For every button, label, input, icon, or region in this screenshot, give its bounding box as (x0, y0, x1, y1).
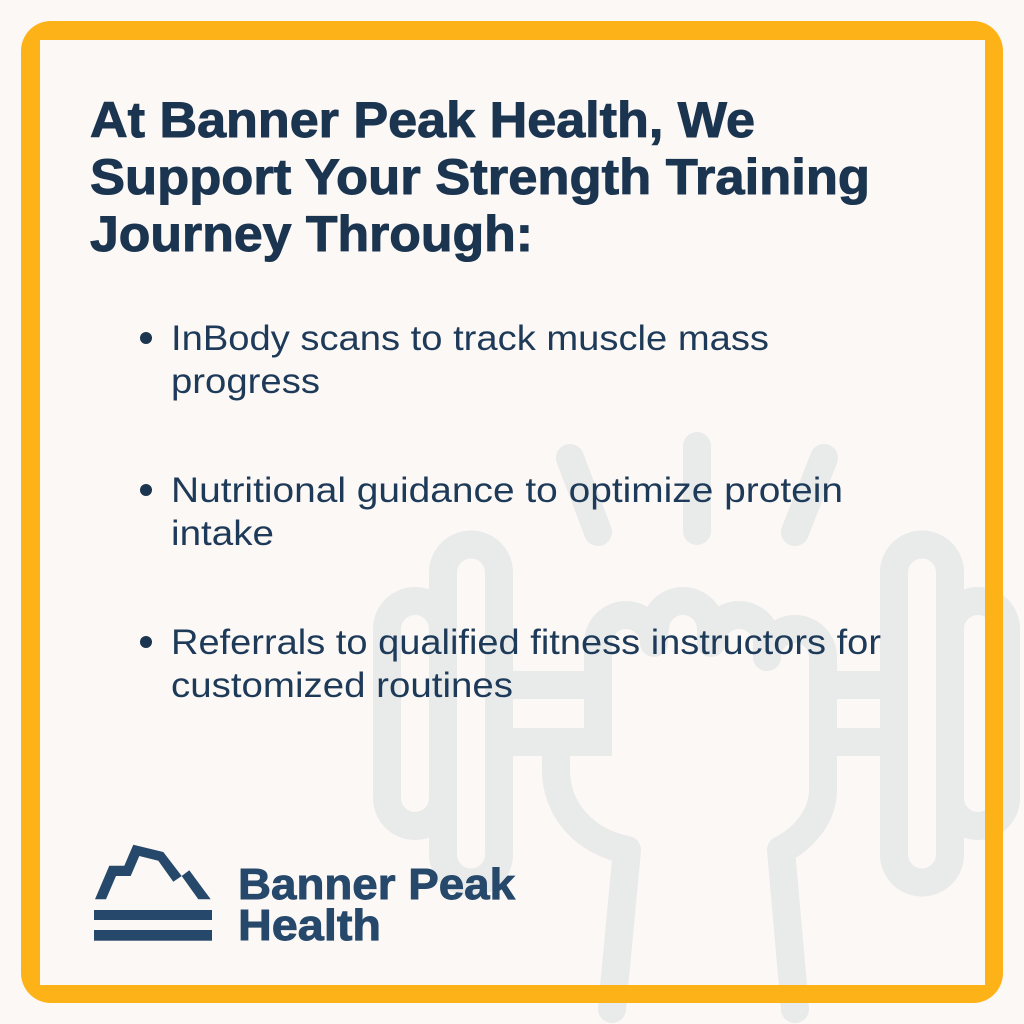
icon: fist and fingers (598, 601, 823, 790)
icon: dumbbell bar (499, 685, 894, 742)
logo wordmark: Health (238, 901, 381, 950)
bullet: nutritional guidance: Nutritional guidance to optimize protein (171, 471, 843, 510)
bullet: InBody scans (140, 319, 769, 401)
bullet: nutritional guidance: intake (171, 514, 274, 553)
bullet: InBody scans: progress (171, 362, 320, 401)
bullet: InBody scans: InBody scans to track muscle mass (171, 319, 769, 358)
logo wordmark (238, 860, 516, 950)
icon: right dumbbell plates (894, 544, 1006, 882)
bullet: fitness referrals: customized routines (171, 666, 513, 705)
logo: Banner Peak Health (94, 845, 516, 950)
logo wordmark: Banner Peak (238, 860, 516, 909)
bullet: nutritional guidance (140, 471, 843, 553)
title: Journey Through: (90, 206, 533, 262)
icon: forearm (556, 755, 823, 1009)
title (90, 92, 870, 262)
icon: flexed fist holding dumbbell watermark (387, 446, 1006, 1009)
icon: mountain logo mark (94, 845, 212, 941)
title: At Banner Peak Health, We (90, 92, 755, 148)
title: Support Your Strength Training (90, 149, 870, 205)
bullet: fitness referrals: Referrals to qualified fitness instructors for (171, 623, 881, 662)
bullet: fitness referrals (140, 623, 881, 705)
icon: left dumbbell plates (387, 544, 499, 882)
icon: impact rays (570, 446, 824, 532)
